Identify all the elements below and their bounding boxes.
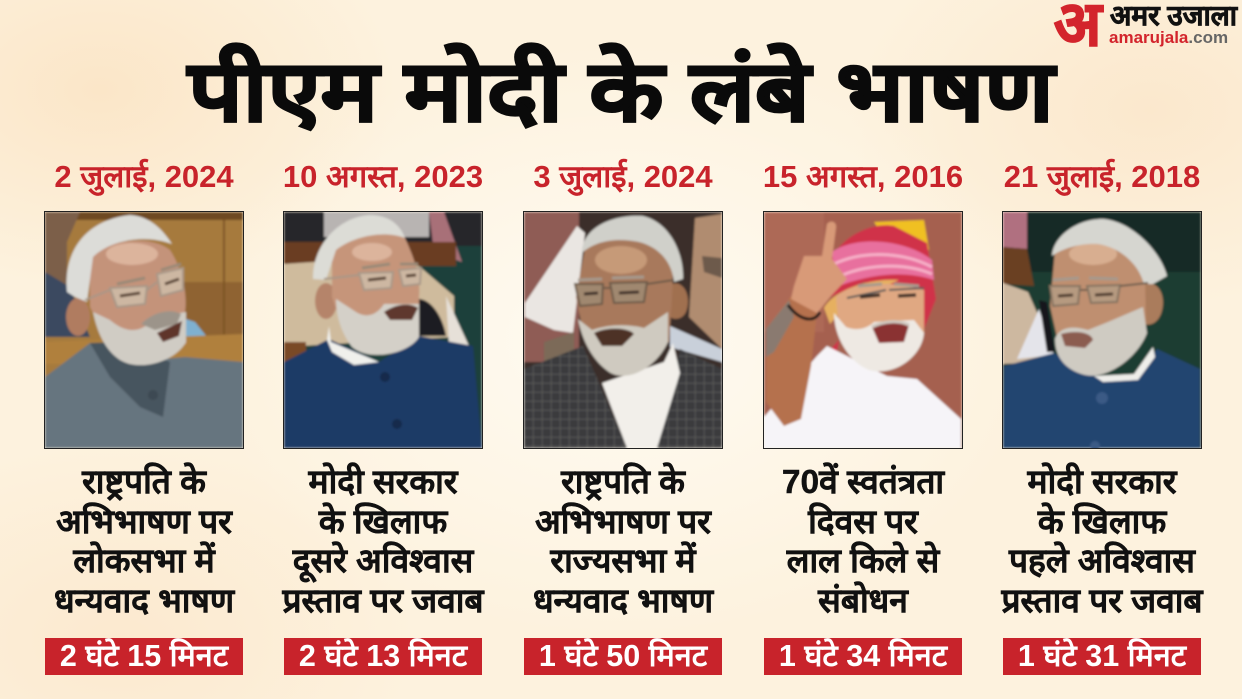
description 2: प्रस्ताव पर जवाब <box>282 582 484 620</box>
duration bar 1: 2 घंटे 15 मिनट <box>60 639 228 673</box>
logo url: amarujala.com <box>1109 28 1228 47</box>
description 1: लोकसभा में <box>73 543 215 580</box>
date 1: 2 जुलाई, 2024 <box>54 159 234 194</box>
description 5: प्रस्ताव पर जवाब <box>1001 582 1203 620</box>
description 2 <box>282 462 485 620</box>
description 3: राज्यसभा में <box>550 543 696 580</box>
description 2: दूसरे अविश्वास <box>293 543 473 580</box>
description 5: के खिलाफ <box>1038 504 1166 540</box>
photo 2: portrait in navy jacket <box>283 211 483 449</box>
description 4: संबोधन <box>818 582 908 620</box>
photo 1: portrait in grey jacket <box>44 211 244 449</box>
photo 3: portrait in plaid vest <box>523 211 723 449</box>
date 2: 10 अगस्त, 2023 <box>283 159 483 194</box>
description 5: पहले अविश्वास <box>1009 543 1195 580</box>
description 1: राष्ट्रपति के <box>82 464 206 501</box>
description 4: दिवस पर <box>808 504 918 540</box>
description 3: धन्यवाद भाषण <box>533 582 713 620</box>
description 1 <box>54 462 236 620</box>
description 5 <box>1000 462 1204 620</box>
description 3: अभिभाषण पर <box>535 504 711 540</box>
description 2: मोदी सरकार <box>309 464 457 501</box>
description 1: धन्यवाद भाषण <box>54 582 234 620</box>
description 5: मोदी सरकार <box>1028 464 1176 501</box>
logo: Amar Ujala <box>1054 0 1238 59</box>
title: पीएम मोदी के लंबे भाषण <box>188 45 1054 139</box>
duration bar 2: 2 घंटे 13 मिनट <box>299 639 467 673</box>
description 2: के खिलाफ <box>319 504 447 540</box>
duration bar 5: 1 घंटे 31 मिनट <box>1018 639 1186 673</box>
logo wordmark: अमर उजाला <box>1110 0 1237 31</box>
photo 5: portrait in blue jacket <box>1002 211 1202 449</box>
duration bar 3: 1 घंटे 50 मिनट <box>539 639 707 673</box>
description 4: 70वें स्वतंत्रता <box>782 464 944 501</box>
description 4: लाल किले से <box>787 543 939 580</box>
date 5: 21 जुलाई, 2018 <box>1004 159 1200 194</box>
description 3: राष्ट्रपति के <box>561 464 685 501</box>
date 3: 3 जुलाई, 2024 <box>533 159 713 194</box>
photo 4: portrait in turban pointing finger <box>763 211 963 449</box>
description 3 <box>533 462 714 620</box>
description 4 <box>782 462 946 620</box>
description 1: अभिभाषण पर <box>56 504 232 540</box>
duration bar 4: 1 घंटे 34 मिनट <box>779 639 947 673</box>
date 4: 15 अगस्त, 2016 <box>763 159 963 194</box>
